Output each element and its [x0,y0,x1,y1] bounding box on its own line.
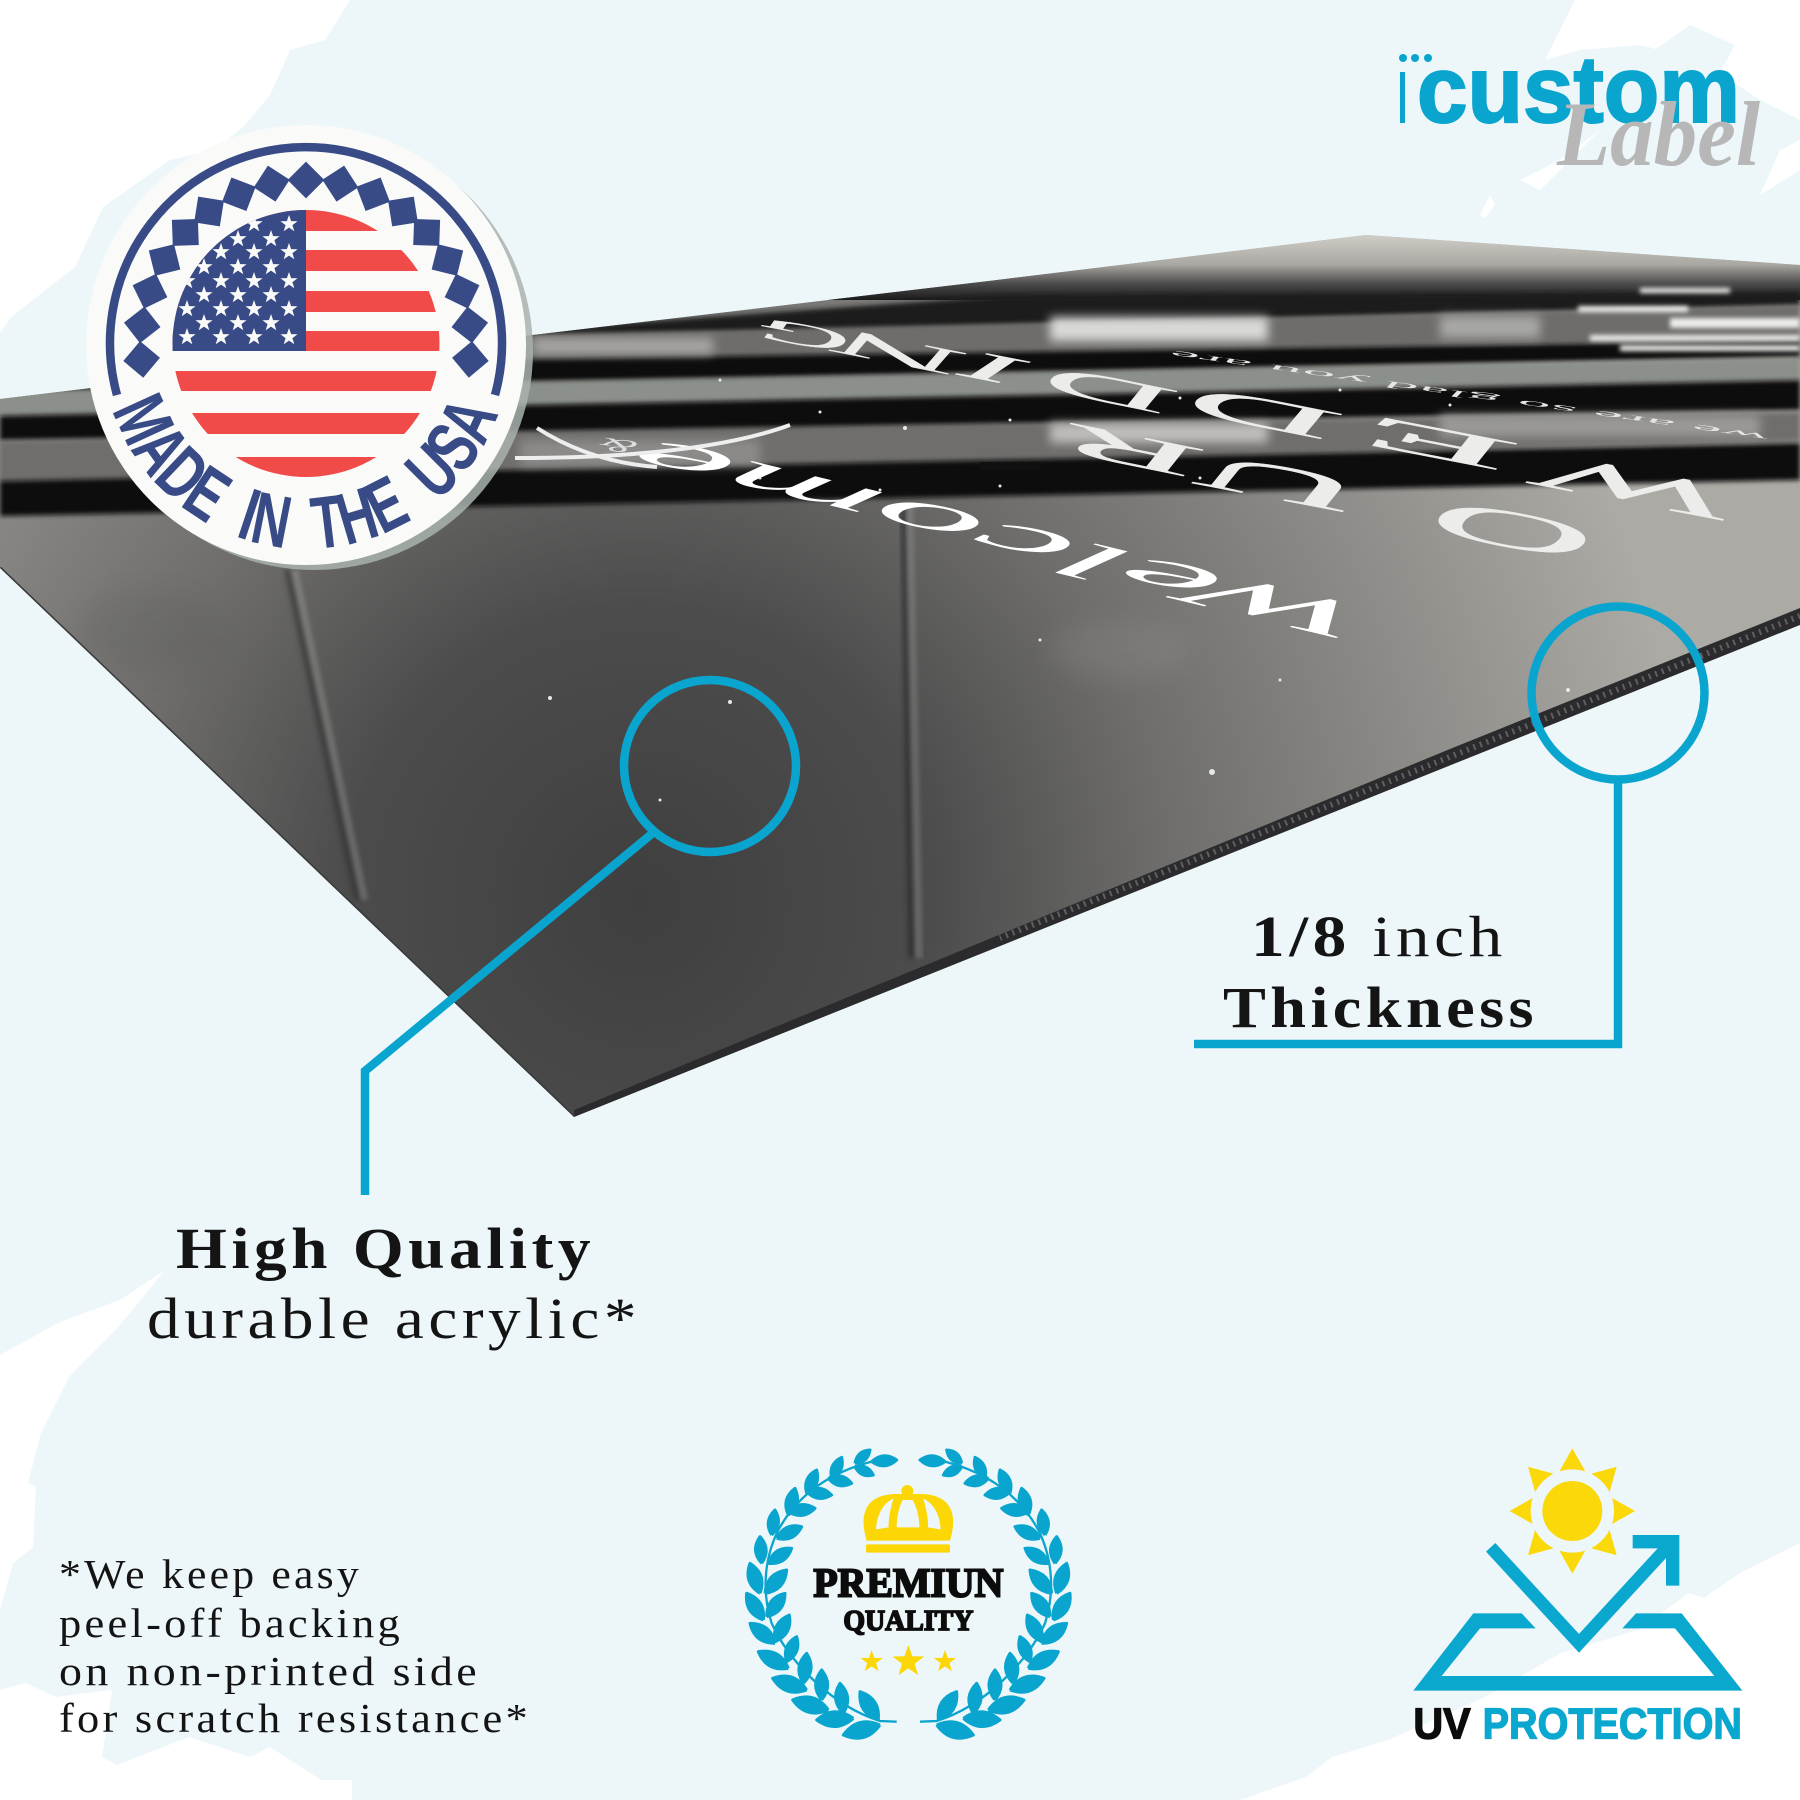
board lettering: U [1179,444,1378,523]
navy ring [110,147,502,395]
curved badge text: MADE IN THE USA [113,392,498,548]
reflected stripes on board [0,230,1800,516]
footnote text: peel-off backing [59,1600,403,1646]
label: high quality durable acrylic: durable acrylic* [147,1286,641,1351]
reflection arrow [1491,1535,1679,1643]
board lettering: E [1343,407,1530,480]
badge disc [86,125,526,565]
badge: made in the usa [86,125,533,570]
footnote text: *We keep easy [59,1551,362,1597]
american flag [172,210,442,478]
three gold stars [861,1645,956,1675]
vertical reflections [80,505,1190,958]
board lettering: Welcome [612,427,1390,652]
board lettering: & [595,433,642,458]
badge shadow [95,132,533,570]
surface shape [1413,1613,1742,1691]
board lettering [515,311,1773,652]
label: 1/8 inch thickness: 1/8 inch [1251,904,1507,969]
uv protection text: UV [1413,1699,1471,1748]
label: high quality durable acrylic: High Quality [176,1216,595,1281]
board lettering: D [1171,378,1354,449]
logo: icustom label: Label [1556,83,1760,185]
label: high quality durable acrylic [147,1216,641,1351]
footnote text: on non-printed side [59,1648,480,1694]
logo: icustom label [1399,37,1760,185]
board lettering: we are so glad you are [1166,349,1773,442]
board lettering: D [1030,358,1188,422]
board lettering: R [1043,414,1217,487]
board surface [0,230,1800,1130]
laurel wreath left [746,1450,897,1738]
label: 1/8 inch thickness: Thickness [1223,975,1538,1040]
acrylic sign board photo [0,230,1800,1130]
label: 1/8 inch thickness [1223,904,1538,1040]
dust specks [548,378,1570,802]
sun [1510,1448,1635,1574]
board lettering: I [939,345,1047,391]
callout: thickness circle and leader [1194,606,1704,1044]
board lettering: W [1517,444,1754,531]
board lettering: G [745,311,860,360]
footnote text: for scratch resistance* [59,1695,531,1741]
board cut edge [0,568,1800,1117]
icon: premium quality badge [746,1450,1070,1738]
uv protection text: PROTECTION [1483,1699,1742,1748]
premium quality text: PREMIUN [813,1560,1004,1606]
board lettering: O [1410,489,1613,572]
premium quality text: QUALITY [843,1605,973,1637]
footnote text [59,1551,531,1741]
premium quality text [813,1560,1004,1637]
diamond border [123,162,489,378]
logo: icustom label: custom [1417,37,1740,143]
laurel wreath right [920,1450,1070,1738]
crown [864,1485,953,1553]
callout: high quality circle and leader [365,680,796,1195]
icon: uv protection [1413,1448,1742,1748]
board lettering: N [819,322,977,383]
blurred top right text [1578,288,1800,351]
